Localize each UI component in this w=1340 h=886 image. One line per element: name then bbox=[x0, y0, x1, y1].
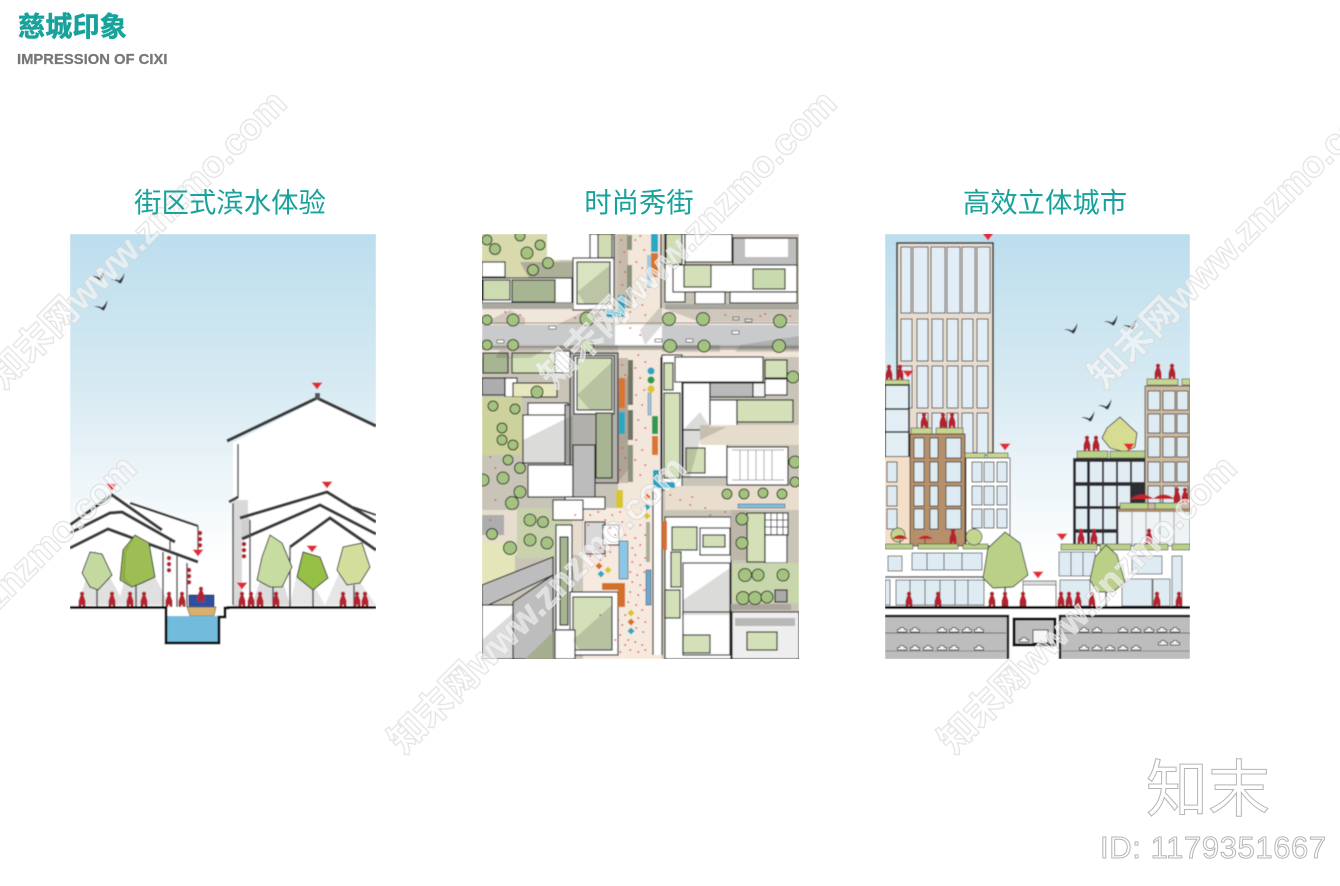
heading: vertical city: 高效立体城市 bbox=[963, 187, 1127, 218]
buildings: middle left bbox=[482, 351, 618, 509]
yellow tree bbox=[1102, 417, 1137, 452]
heading: fashion street: 时尚秀街 bbox=[584, 187, 694, 218]
canal water bbox=[167, 616, 218, 642]
icon: birds bbox=[91, 270, 124, 310]
level markers bbox=[902, 234, 1134, 578]
panel: aerial street map bbox=[477, 231, 801, 659]
beige right building bbox=[1145, 379, 1190, 511]
watermarks bbox=[0, 82, 1340, 761]
centre low pavilion bbox=[1023, 581, 1056, 607]
left houses bbox=[70, 495, 200, 607]
level markers bbox=[106, 382, 332, 590]
id watermark: ID: 1179351667 bbox=[1100, 830, 1327, 865]
tall house bbox=[227, 393, 376, 607]
coloured street elements bbox=[596, 234, 675, 634]
title bbox=[17, 11, 167, 68]
buildings: upper left bbox=[482, 234, 614, 310]
street spine bbox=[583, 234, 662, 659]
underground parking bbox=[885, 607, 1190, 659]
tower bbox=[897, 243, 993, 455]
boat bbox=[187, 595, 216, 616]
lanterns bbox=[169, 533, 244, 584]
red pedestrian dots bbox=[490, 236, 790, 652]
people bbox=[886, 364, 1188, 607]
brown building bbox=[910, 428, 965, 546]
people bbox=[78, 587, 368, 607]
heading: waterfront block: 街区式滨水体验 bbox=[134, 187, 326, 218]
trees bbox=[983, 532, 1125, 607]
panel: waterfront section illustration bbox=[70, 234, 376, 659]
mid terrace bbox=[1118, 494, 1190, 546]
right podium bbox=[1058, 544, 1190, 607]
white building bbox=[965, 453, 1010, 546]
title: 慈城印象 bbox=[18, 11, 127, 42]
icon: birds bbox=[1064, 315, 1136, 422]
watermarks: 知末网www.znzmo.com bbox=[931, 447, 1244, 761]
cast shadows bbox=[482, 265, 799, 659]
subtitle: IMPRESSION OF CIXI bbox=[17, 52, 167, 68]
trees bbox=[82, 535, 370, 607]
cross road bbox=[482, 308, 799, 357]
left podium bbox=[885, 528, 990, 607]
buildings: lower left bbox=[482, 500, 619, 659]
street trees bbox=[477, 231, 801, 604]
logo watermark: 知末 bbox=[1146, 756, 1270, 825]
left block bbox=[885, 380, 910, 547]
ground section line bbox=[70, 608, 376, 643]
watermarks: 知末网www.znzmo.com bbox=[381, 447, 694, 761]
buildings: upper right bbox=[665, 234, 799, 309]
panel: vertical city section bbox=[885, 234, 1190, 659]
right houses bbox=[240, 492, 376, 607]
dark building bbox=[1073, 451, 1145, 546]
buildings: lower right bbox=[665, 510, 799, 659]
watermarks: 知末网www.znzmo.com bbox=[531, 82, 844, 396]
buildings: middle right bbox=[662, 355, 799, 510]
